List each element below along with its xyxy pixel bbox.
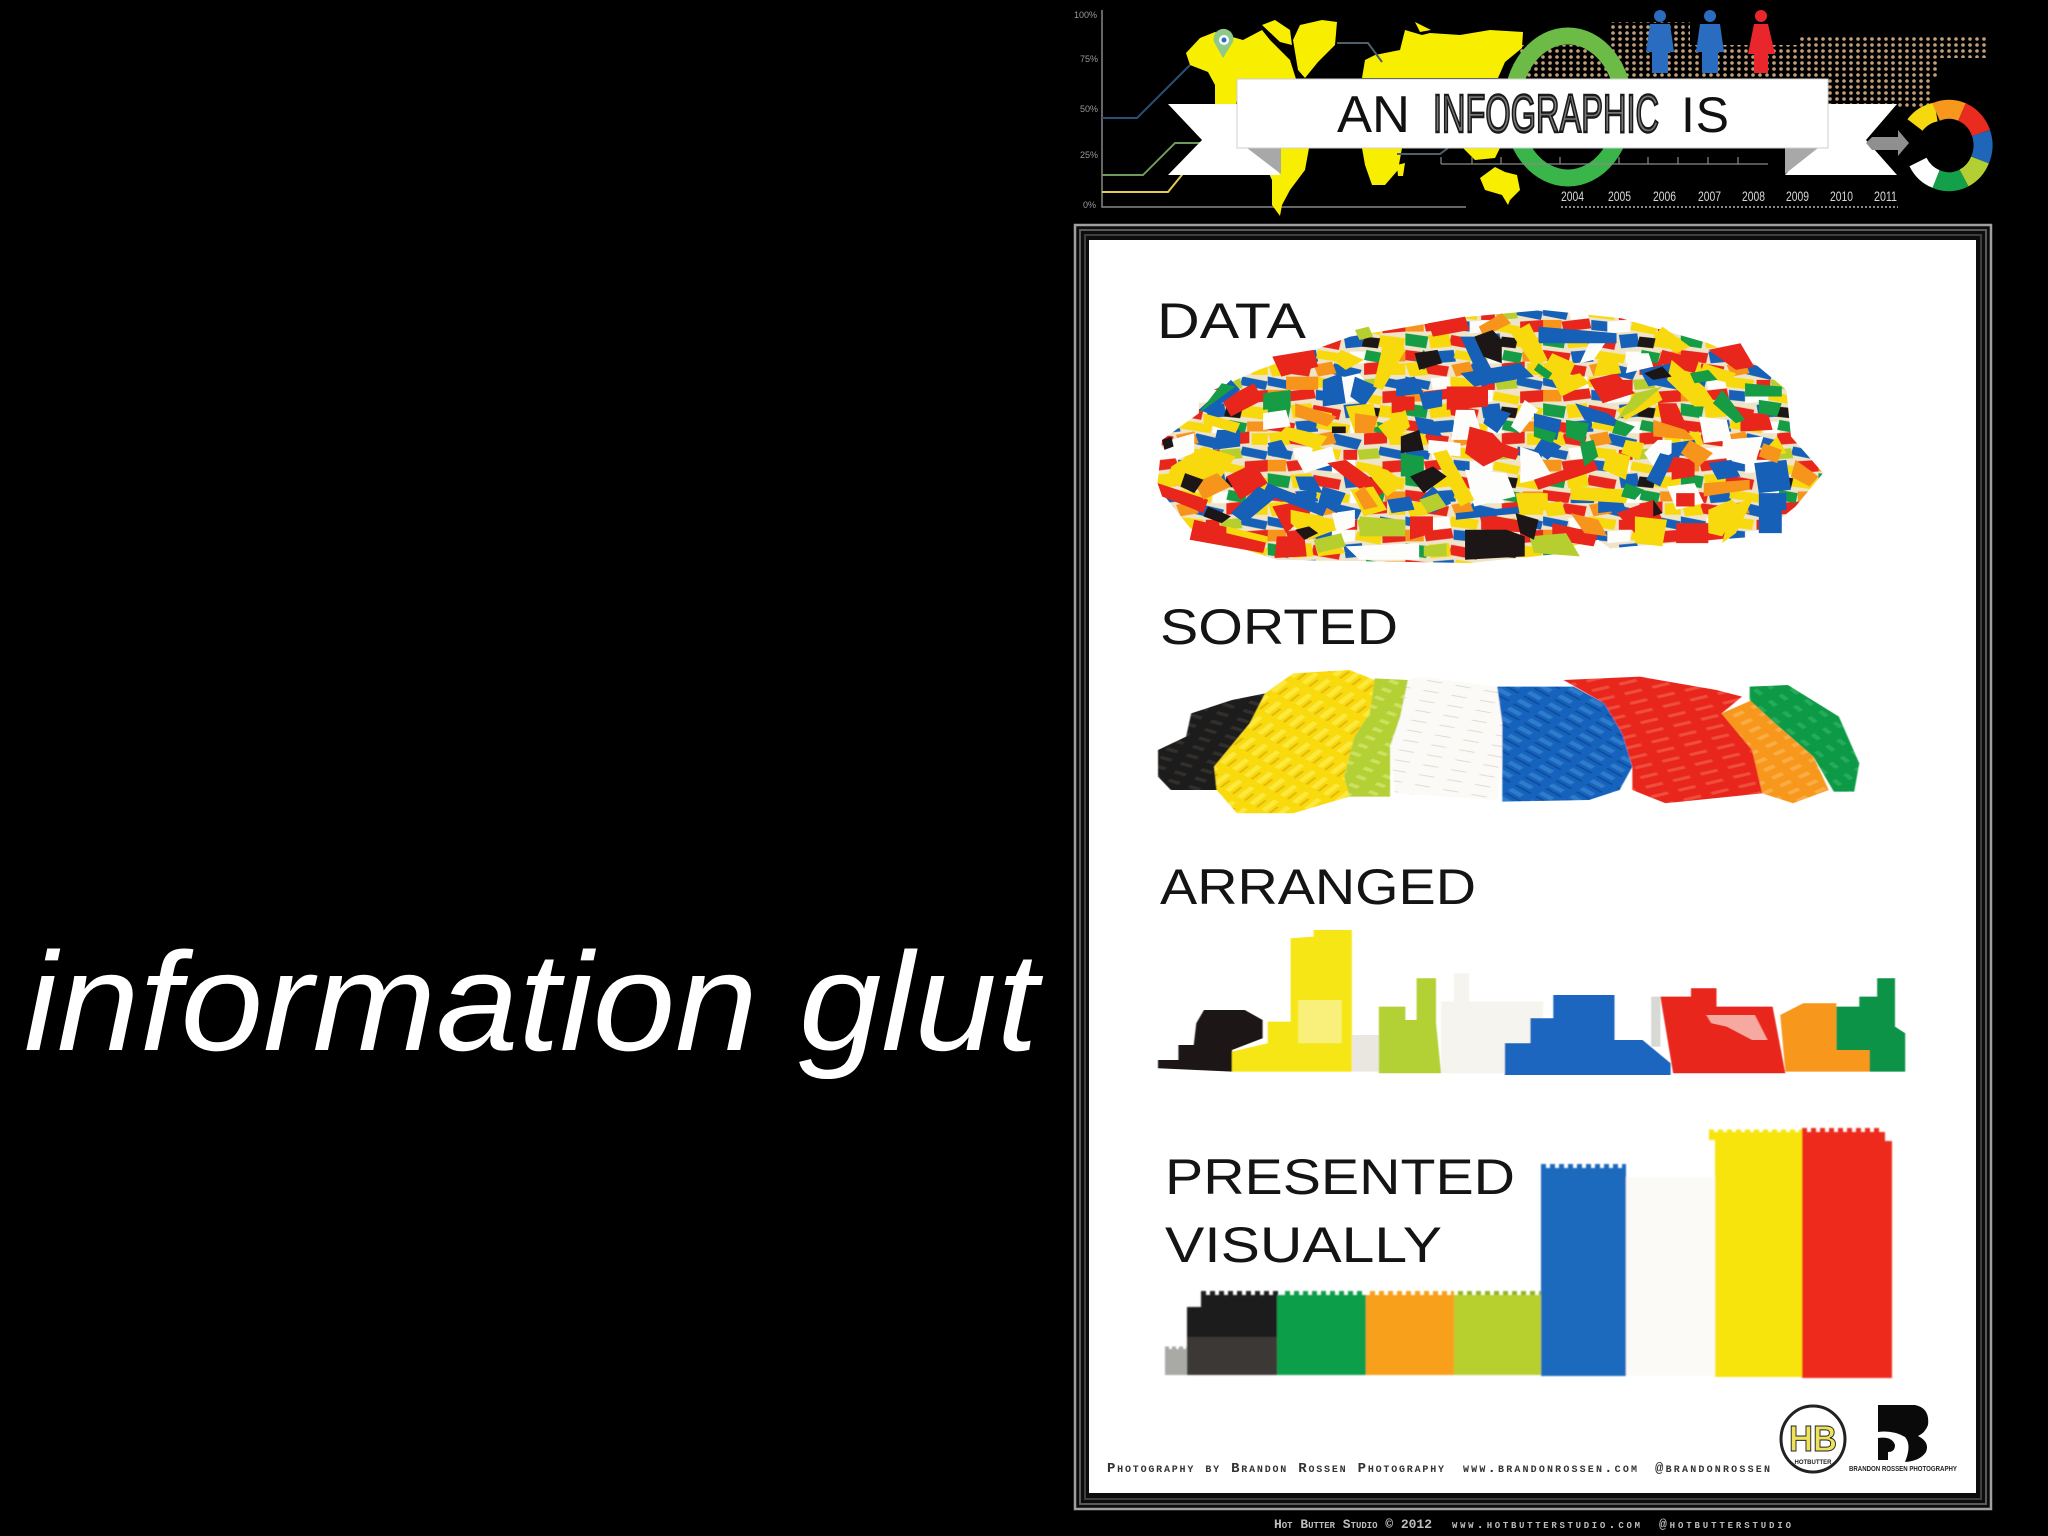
icon: location pin <box>1214 29 1233 58</box>
axis chart with percent labels: 0% <box>1083 200 1096 210</box>
banner text: INFOGRAPHIC <box>1433 84 1659 144</box>
logo: brandon rossen: BRANDON ROSSEN PHOTOGRAPHY <box>1849 1466 1957 1473</box>
timeline: 2010 <box>1830 188 1853 204</box>
connector lines <box>1337 43 1448 154</box>
logo: hot butter: HB <box>1789 1418 1837 1459</box>
photo credit line: www.brandonrossen.com <box>1463 1461 1637 1477</box>
title: information glut: information glut <box>24 923 1043 1080</box>
icon: gray arrow <box>1866 130 1909 156</box>
poster frame <box>1075 225 1991 1509</box>
header graphic <box>1074 10 1986 216</box>
timeline: 2007 <box>1698 188 1721 204</box>
axis chart with percent labels: 50% <box>1080 104 1098 114</box>
timeline: 2004 <box>1561 188 1584 204</box>
logo: hot butter: HOTBUTTER <box>1794 1460 1832 1466</box>
lego skyline <box>1158 930 1905 1075</box>
photo credit line: @brandonrossen <box>1655 1461 1770 1477</box>
icon: two men and one woman <box>1646 10 1775 73</box>
logo: brandon rossen <box>1849 1405 1957 1473</box>
banner text: AN <box>1337 86 1410 144</box>
green ring <box>1512 36 1624 178</box>
dotted world map <box>1520 22 1986 108</box>
ribbon banner <box>1168 79 1897 175</box>
heading: presented visually <box>1165 1149 1515 1273</box>
lego pile: unsorted bricks <box>1158 310 1823 563</box>
lego bar chart <box>1165 1130 1892 1378</box>
panel: data <box>1157 293 1823 563</box>
timeline: 2009 <box>1786 188 1809 204</box>
studio credit line <box>1274 1517 1792 1532</box>
panel: presented visually <box>1165 1130 1892 1378</box>
heading: data: DATA <box>1157 293 1307 349</box>
logo: hot butter <box>1781 1406 1845 1472</box>
studio credit line: Hot Butter Studio © 2012 <box>1274 1517 1432 1532</box>
photo credit line: Photography by Brandon Rossen Photography <box>1107 1461 1444 1477</box>
photo credit line <box>1107 1461 1770 1477</box>
heading: presented visually: PRESENTED <box>1165 1149 1515 1205</box>
studio credit line: @hotbutterstudio <box>1659 1517 1792 1532</box>
yellow world map <box>1186 20 1523 216</box>
studio credit line: www.hotbutterstudio.com <box>1452 1517 1640 1532</box>
timeline: 2011 <box>1874 188 1897 204</box>
heading: sorted: SORTED <box>1160 599 1398 655</box>
icon: color wheel <box>1915 109 1983 182</box>
timeline: 2006 <box>1653 188 1676 204</box>
axis chart with percent labels <box>1074 10 1466 210</box>
axis chart with percent labels: 25% <box>1080 150 1098 160</box>
axis chart with percent labels: 100% <box>1074 10 1097 20</box>
heading: arranged: ARRANGED <box>1160 859 1476 915</box>
panel: sorted <box>1158 599 1859 813</box>
timeline: 2005 <box>1608 188 1631 204</box>
axis chart with percent labels: 75% <box>1080 54 1098 64</box>
timeline <box>1441 157 1898 207</box>
heading: presented visually: VISUALLY <box>1165 1217 1442 1273</box>
lego piles sorted by colour <box>1158 670 1859 813</box>
banner text: IS <box>1681 87 1729 143</box>
timeline: 2008 <box>1742 188 1765 204</box>
banner text <box>1337 84 1729 144</box>
panel: arranged <box>1158 859 1905 1075</box>
